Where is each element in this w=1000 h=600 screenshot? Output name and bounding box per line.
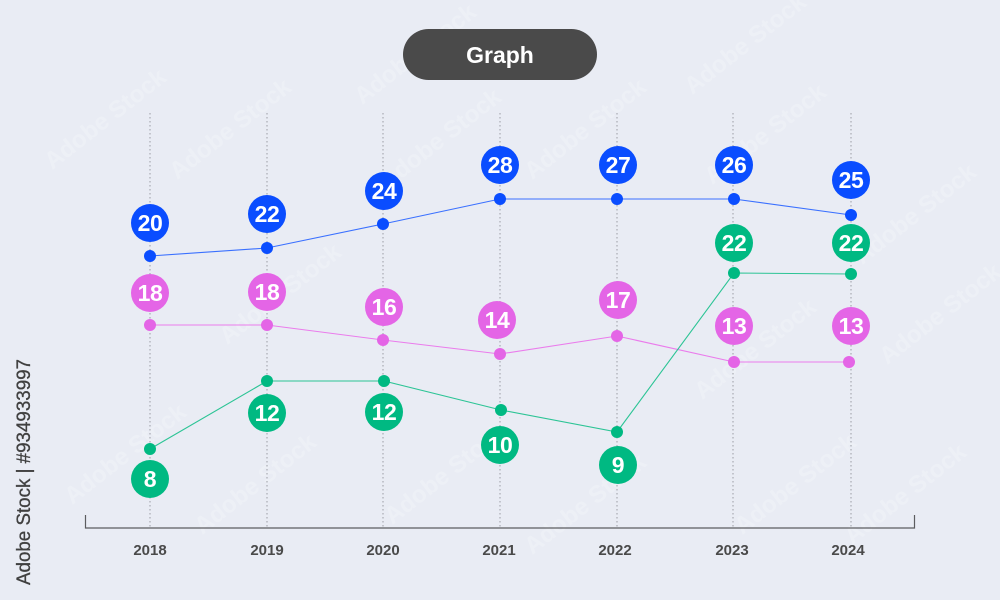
x axis year labels: [133, 542, 865, 559]
blue data series: [131, 146, 870, 262]
blue data series: 24: [372, 178, 397, 204]
green data series: 12: [255, 400, 279, 426]
pink data series: [131, 273, 870, 368]
green data series: [131, 224, 870, 498]
text: Adobe Stock: [39, 63, 172, 175]
x axis bracket: [86, 515, 914, 528]
x axis year labels: 2023: [715, 542, 749, 559]
text: Adobe Stock: [689, 293, 822, 405]
green data series: 12: [372, 399, 396, 425]
text: Adobe Stock: [849, 158, 982, 270]
pink data series: 16: [372, 294, 396, 320]
text: Adobe Stock: [59, 398, 192, 510]
pink data series: 13: [839, 313, 863, 339]
blue data series: 25: [839, 167, 864, 193]
vertical stock credit text: Adobe Stock | #934933997: [14, 359, 35, 585]
blue data series: 22: [255, 201, 279, 227]
text: Adobe Stock: [699, 78, 832, 190]
green data series: 22: [722, 230, 746, 256]
green data series: 10: [488, 432, 512, 458]
text: Adobe Stock: [189, 428, 322, 540]
green data series: 8: [144, 466, 157, 492]
text: Adobe Stock: [729, 428, 862, 540]
blue data series: 20: [138, 210, 162, 236]
pink data series: 13: [722, 313, 746, 339]
text: Adobe Stock: [349, 0, 482, 110]
text: Adobe Stock: [839, 438, 972, 550]
x axis year labels: 2018: [133, 542, 167, 559]
pink data series: 17: [606, 287, 630, 313]
blue data series: 27: [606, 152, 630, 178]
text: Adobe Stock: [374, 83, 507, 195]
blue data series: 28: [488, 152, 513, 178]
x axis year labels: 2024: [831, 542, 865, 559]
green data series: 9: [612, 452, 624, 478]
text: Adobe Stock: [164, 73, 297, 185]
blue data series: 26: [722, 152, 746, 178]
title pill: Graph: Graph: [466, 42, 534, 68]
text: Adobe Stock: [379, 418, 512, 530]
pink data series: 18: [138, 280, 163, 306]
green data series: 22: [839, 230, 863, 256]
x axis year labels: 2020: [366, 542, 400, 559]
pink data series: 14: [485, 307, 510, 333]
pink data series: 18: [255, 279, 280, 305]
text: Adobe Stock: [519, 448, 652, 560]
x axis year labels: 2021: [482, 542, 516, 559]
title pill: Graph: [403, 29, 597, 80]
x axis year labels: 2019: [250, 542, 284, 559]
text: Adobe Stock: [214, 238, 347, 350]
x axis year labels: 2022: [598, 542, 632, 559]
text: Adobe Stock: [519, 73, 652, 185]
